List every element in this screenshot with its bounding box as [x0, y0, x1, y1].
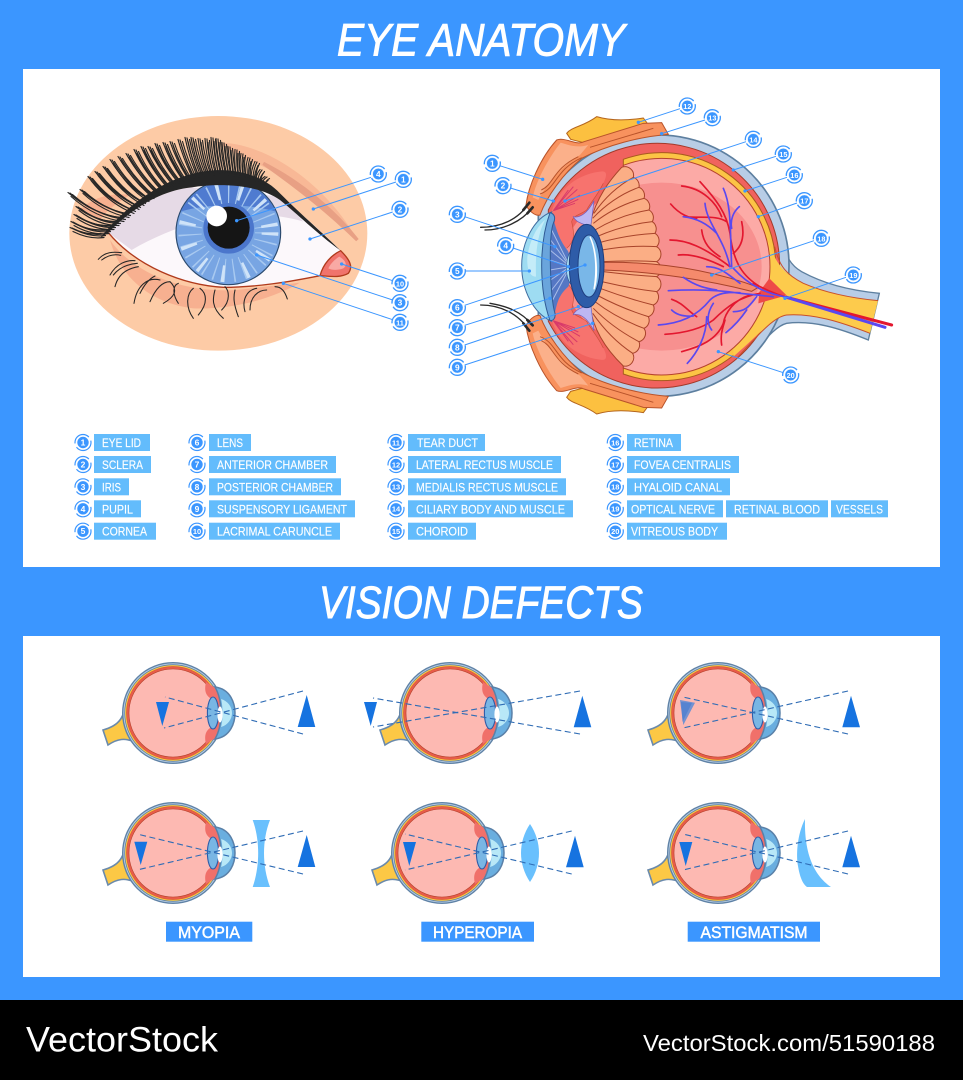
panel: vision defects	[23, 636, 940, 977]
callout 3 iris	[255, 253, 408, 311]
legend item 6	[189, 434, 251, 451]
legend item 3	[75, 478, 129, 495]
callout 14: 14	[749, 135, 758, 144]
legend item 17: FOVEA CENTRALIS	[634, 458, 731, 472]
optic nerve sheath	[740, 230, 879, 367]
legend item 11: 11	[392, 438, 400, 447]
callout 8: 8	[455, 342, 460, 352]
callout 1 eyelid: 1	[401, 174, 406, 184]
legend item 12	[388, 456, 561, 473]
callout 19	[783, 267, 861, 300]
callouts on external eye	[235, 166, 411, 330]
eyelashes cross-section	[481, 203, 533, 331]
lower eyelashes	[98, 252, 287, 318]
callout 12	[637, 98, 695, 124]
label: astigmatism: ASTIGMATISM	[700, 924, 808, 942]
callout 19: 19	[849, 271, 857, 280]
legend item 20: 20	[611, 527, 619, 536]
callout 18: 18	[817, 234, 825, 243]
legend item 12: LATERAL RECTUS MUSCLE	[416, 458, 553, 472]
callout 1 eyelid	[312, 171, 411, 211]
legend item 5	[75, 523, 156, 540]
iris and pupil	[100, 170, 351, 285]
legend item 18: 18	[611, 483, 619, 492]
legend item 7	[189, 456, 336, 473]
illustration: external eye	[68, 116, 411, 351]
skin patch	[69, 116, 367, 351]
legend item 19: 19	[611, 505, 619, 514]
hyaloid canal	[603, 262, 758, 291]
callout 20: 20	[787, 371, 795, 380]
legend item 14: 14	[392, 505, 401, 514]
callout 16: 16	[790, 171, 798, 180]
callout 6	[449, 263, 587, 316]
iris	[547, 214, 571, 320]
callout 6: 6	[455, 303, 460, 313]
legend item 10: LACRIMAL CARUNCLE	[217, 525, 332, 539]
callout 7	[449, 297, 552, 336]
blue retinal vessels	[658, 188, 885, 363]
lens	[569, 224, 604, 308]
callout 11 tear duct	[282, 282, 408, 330]
callout 17	[757, 193, 812, 218]
legend item 19: VESSELS	[836, 502, 883, 516]
ciliary folds	[590, 167, 661, 366]
legend item 16	[607, 434, 681, 451]
legend item 20: VITREOUS BODY	[631, 525, 718, 539]
callout 2 sclera	[308, 201, 408, 241]
legend item 5: CORNEA	[102, 525, 147, 539]
legend item 12: 12	[392, 460, 400, 469]
footer logo: VectorStock	[26, 1020, 219, 1060]
ciliary body lower	[552, 283, 606, 360]
legend item 9: SUSPENSORY LIGAMENT	[217, 502, 348, 516]
callout 13	[660, 110, 720, 135]
legend item 13: MEDIALIS RECTUS MUSCLE	[416, 480, 558, 494]
legend item 2: SCLERA	[102, 458, 143, 472]
label: myopia: MYOPIA	[178, 924, 240, 942]
callout 10 caruncle: 10	[396, 279, 404, 288]
legend item 18: HYALOID CANAL	[634, 480, 722, 494]
legend item 9: 9	[195, 504, 200, 514]
callout 2: 2	[501, 181, 506, 191]
legend item 5: 5	[81, 526, 86, 536]
vitreous body	[623, 158, 770, 375]
legend item 1: EYE LID	[102, 436, 141, 450]
legend item 1	[75, 434, 150, 451]
sclera	[538, 135, 789, 396]
diagram: astigmatism uncorrected	[648, 663, 860, 763]
legend item 13	[388, 478, 566, 495]
legend item 4	[75, 500, 141, 517]
choroid	[548, 143, 780, 388]
callout 12: 12	[683, 102, 691, 111]
callout 16	[743, 167, 802, 193]
diagram: hyperopia uncorrected	[364, 663, 591, 763]
callout 11 tear duct: 11	[396, 318, 404, 327]
callout 4 pupil: 4	[376, 169, 381, 179]
legend item 18	[607, 478, 730, 495]
legend item 3: IRIS	[102, 480, 121, 494]
central retinal wedge	[758, 278, 787, 303]
legend item 20	[607, 523, 727, 540]
legend item 8: POSTERIOR CHAMBER	[217, 480, 333, 494]
legend item 15: 15	[392, 527, 400, 536]
legend item 8	[189, 478, 341, 495]
callout 15: 15	[779, 150, 787, 159]
callout 3: 3	[455, 209, 460, 219]
callout 15	[732, 146, 791, 172]
ciliary body upper	[552, 171, 606, 248]
callout 1	[484, 155, 544, 181]
legend item 10: 10	[193, 527, 201, 536]
callout 3 iris: 3	[398, 298, 403, 308]
label: myopia	[166, 922, 252, 942]
anterior chamber	[566, 251, 573, 284]
diagram: hyperopia corrected	[372, 803, 584, 903]
legend item 16: 16	[611, 438, 619, 447]
callout 1: 1	[490, 158, 495, 168]
legend item 16: RETINA	[634, 436, 673, 450]
legend item 10	[189, 523, 340, 540]
callout 18	[710, 230, 829, 277]
footer bar	[0, 1000, 963, 1080]
legend item 2	[75, 456, 151, 473]
legend item 1: 1	[81, 438, 86, 448]
legend item 19	[607, 500, 888, 517]
legend item 14	[388, 500, 573, 517]
upper eyelashes	[68, 138, 270, 238]
callout 9	[449, 322, 594, 375]
legend item 7: 7	[195, 460, 200, 470]
legend item 8: 8	[195, 482, 200, 492]
callout 3	[449, 206, 557, 248]
legend item 17: 17	[611, 460, 619, 469]
legend item 3: 3	[81, 482, 86, 492]
callout 4	[498, 238, 570, 268]
optic nerve	[733, 242, 878, 358]
callout 13: 13	[708, 114, 716, 123]
callout 7: 7	[455, 323, 460, 333]
legend item 11: TEAR DUCT	[417, 436, 479, 450]
legend	[75, 434, 888, 540]
legend item 14: CILIARY BODY AND MUSCLE	[416, 502, 565, 516]
callout 9: 9	[455, 362, 460, 372]
legend item 9	[189, 500, 355, 517]
legend item 13: 13	[392, 483, 400, 492]
legend item 2: 2	[81, 460, 86, 470]
legend item 7: ANTERIOR CHAMBER	[217, 458, 328, 472]
panel: eye anatomy	[23, 69, 940, 567]
callout 4 pupil	[235, 166, 386, 222]
illustration: eye cross-section	[449, 98, 892, 414]
heading: vision defects: VISION DEFECTS	[319, 577, 643, 628]
callout 5: 5	[455, 266, 460, 276]
diagram: myopia uncorrected	[103, 663, 315, 763]
legend item 19: RETINAL BLOOD	[734, 502, 820, 516]
legend item 6: 6	[195, 438, 200, 448]
callout 5	[449, 263, 531, 279]
callout 14	[563, 131, 761, 203]
legend item 4: 4	[81, 504, 86, 514]
label: hyperopia: HYPEROPIA	[433, 924, 522, 942]
legend item 15: CHOROID	[416, 525, 468, 539]
eyelid and muscles lower	[526, 315, 668, 414]
diagram: myopia corrected	[103, 803, 315, 903]
callout 2 sclera: 2	[398, 204, 403, 214]
callout 2	[495, 178, 555, 203]
red retinal vessels	[665, 182, 892, 352]
legend item 19: OPTICAL NERVE	[631, 502, 715, 516]
legend item 17	[607, 456, 739, 473]
legend item 15	[388, 523, 476, 540]
diagram: astigmatism corrected	[648, 803, 860, 903]
legend item 11	[388, 434, 485, 451]
callout 17: 17	[800, 197, 808, 206]
heading: eye anatomy: EYE ANATOMY	[337, 14, 628, 66]
callout 4: 4	[503, 241, 508, 251]
legend item 4: PUPIL	[102, 502, 133, 516]
callout 20	[717, 350, 799, 383]
legend item 6: LENS	[217, 436, 243, 450]
callout 10 caruncle	[340, 262, 408, 291]
retina	[623, 153, 776, 381]
cornea	[522, 212, 555, 321]
footer url: VectorStock.com/51590188	[643, 1030, 935, 1056]
eyelid and muscles upper	[526, 117, 668, 215]
callout 8	[449, 305, 580, 355]
